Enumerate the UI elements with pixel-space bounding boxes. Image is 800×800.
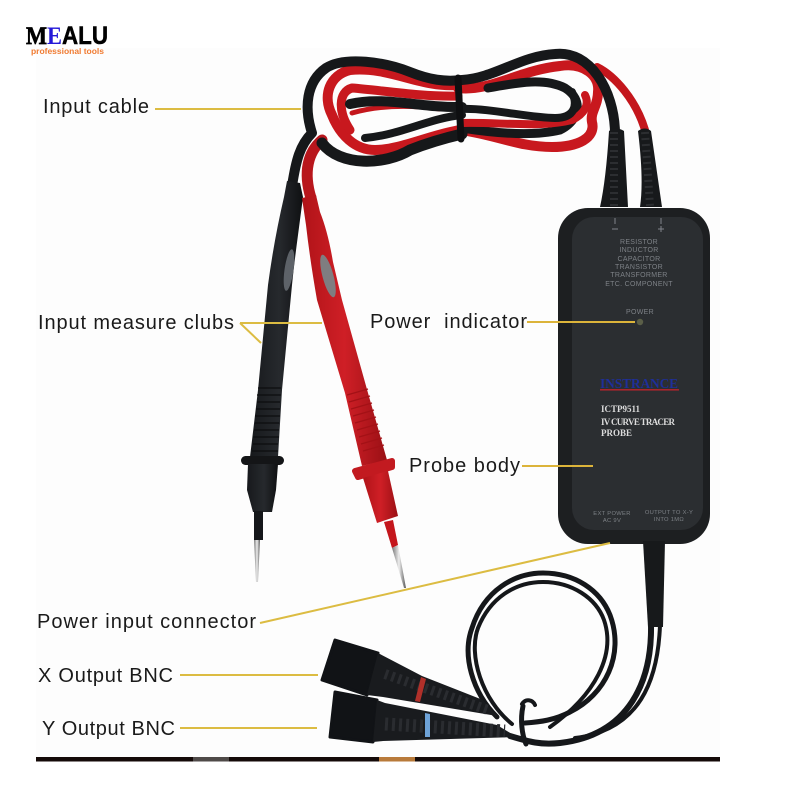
model text: ICTP9511 xyxy=(601,404,641,414)
label: power input connector: Power input connector xyxy=(37,611,256,633)
label: power input connector xyxy=(37,543,610,633)
body text: component list: ETC. COMPONENT xyxy=(605,281,673,288)
output boot xyxy=(643,541,665,627)
body text: component list: INDUCTOR xyxy=(619,247,659,254)
model text: PROBE xyxy=(601,428,632,438)
model text xyxy=(601,404,676,438)
body text: component list: TRANSFORMER xyxy=(610,272,668,279)
black test probe xyxy=(241,181,303,582)
power LED: POWER xyxy=(626,309,654,316)
body text: component list: RESISTOR xyxy=(620,239,658,246)
power LED xyxy=(626,309,654,325)
logo: professional tools xyxy=(31,46,104,56)
logo xyxy=(26,22,108,56)
port labels: EXT POWER xyxy=(593,511,631,517)
input cable bundle xyxy=(292,54,645,198)
port labels: OUTPUT TO X-Y xyxy=(645,510,693,516)
probe body xyxy=(558,208,710,544)
label: X output BNC: X Output BNC xyxy=(38,665,173,687)
label: input measure clubs: Input measure clubs xyxy=(38,312,234,334)
port labels: INTO 1MΩ xyxy=(654,517,684,523)
cable boots at probe top xyxy=(600,128,662,207)
logo: E xyxy=(47,23,62,50)
port labels: AC 9V xyxy=(603,518,621,524)
brand: INSTRANCE xyxy=(600,377,678,392)
label: input cable: Input cable xyxy=(43,96,149,118)
red test probe xyxy=(302,195,406,588)
logo: M xyxy=(26,23,47,50)
bottom bar xyxy=(36,757,720,762)
logo: ALU xyxy=(62,22,108,50)
X output BNC xyxy=(322,640,497,716)
body text: component list xyxy=(605,239,673,288)
body text: component list: TRANSISTOR xyxy=(615,264,663,271)
label: probe body: Probe body xyxy=(409,455,520,477)
label: input measure clubs xyxy=(38,312,322,343)
label: power indicator: Power indicator xyxy=(370,311,527,333)
label: Y output BNC: Y Output BNC xyxy=(42,718,175,740)
body text: component list: CAPACITOR xyxy=(618,256,660,263)
Y output BNC xyxy=(330,692,517,742)
port labels xyxy=(593,510,693,524)
model text: IV CURVE TRACER xyxy=(601,417,676,427)
output cable xyxy=(468,573,660,744)
